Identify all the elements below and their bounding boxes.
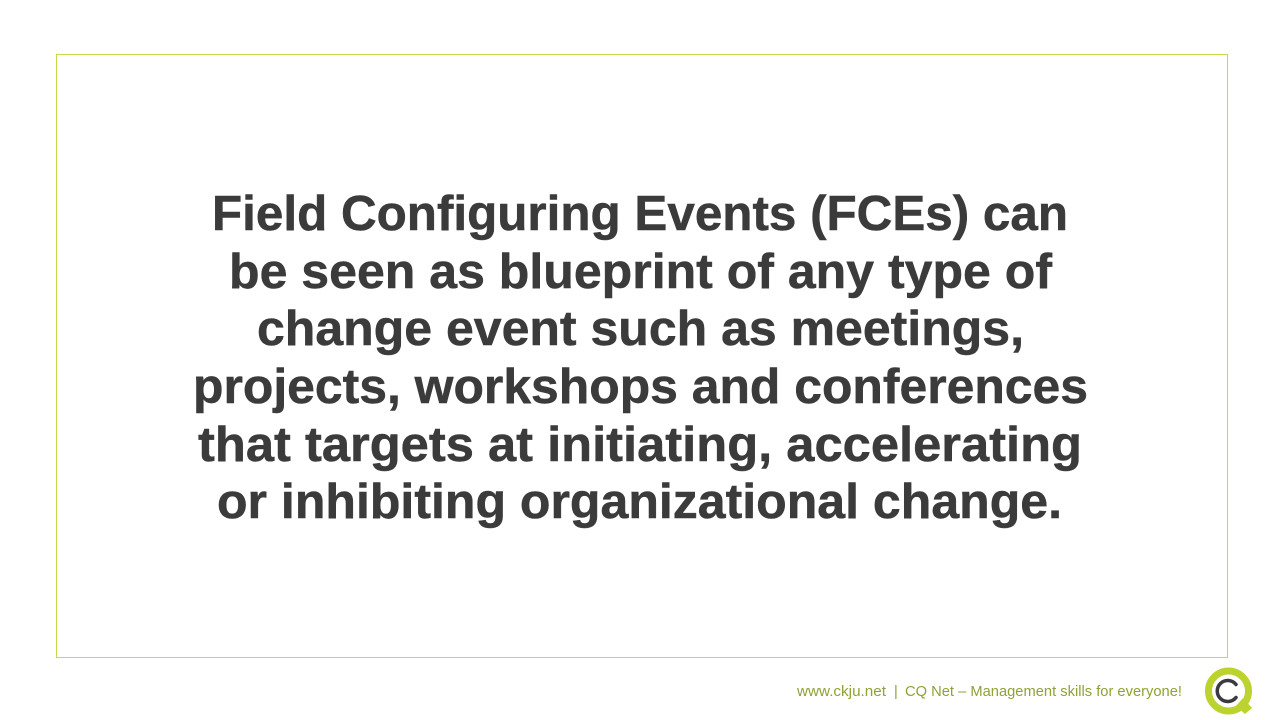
footer: website and tagline: www.ckju.net bbox=[796, 684, 886, 700]
heading: main statement: change event such as meetings, bbox=[257, 302, 1024, 356]
footer: website and tagline: CQ Net – Management skills for everyone! bbox=[905, 684, 1182, 700]
heading: main statement bbox=[193, 187, 1088, 529]
footer: website and tagline: | bbox=[894, 684, 898, 700]
panel: content frame bbox=[56, 54, 1228, 658]
heading: main statement: Field Configuring Events (FCEs) can bbox=[212, 187, 1068, 241]
heading: main statement: or inhibiting organizational change. bbox=[217, 475, 1062, 529]
icon: CQ logo bbox=[1208, 671, 1252, 714]
heading: main statement: be seen as blueprint of any type of bbox=[229, 245, 1053, 299]
heading: main statement: that targets at initiating, accelerating bbox=[198, 418, 1082, 472]
heading: main statement: projects, workshops and conferences bbox=[193, 360, 1088, 414]
